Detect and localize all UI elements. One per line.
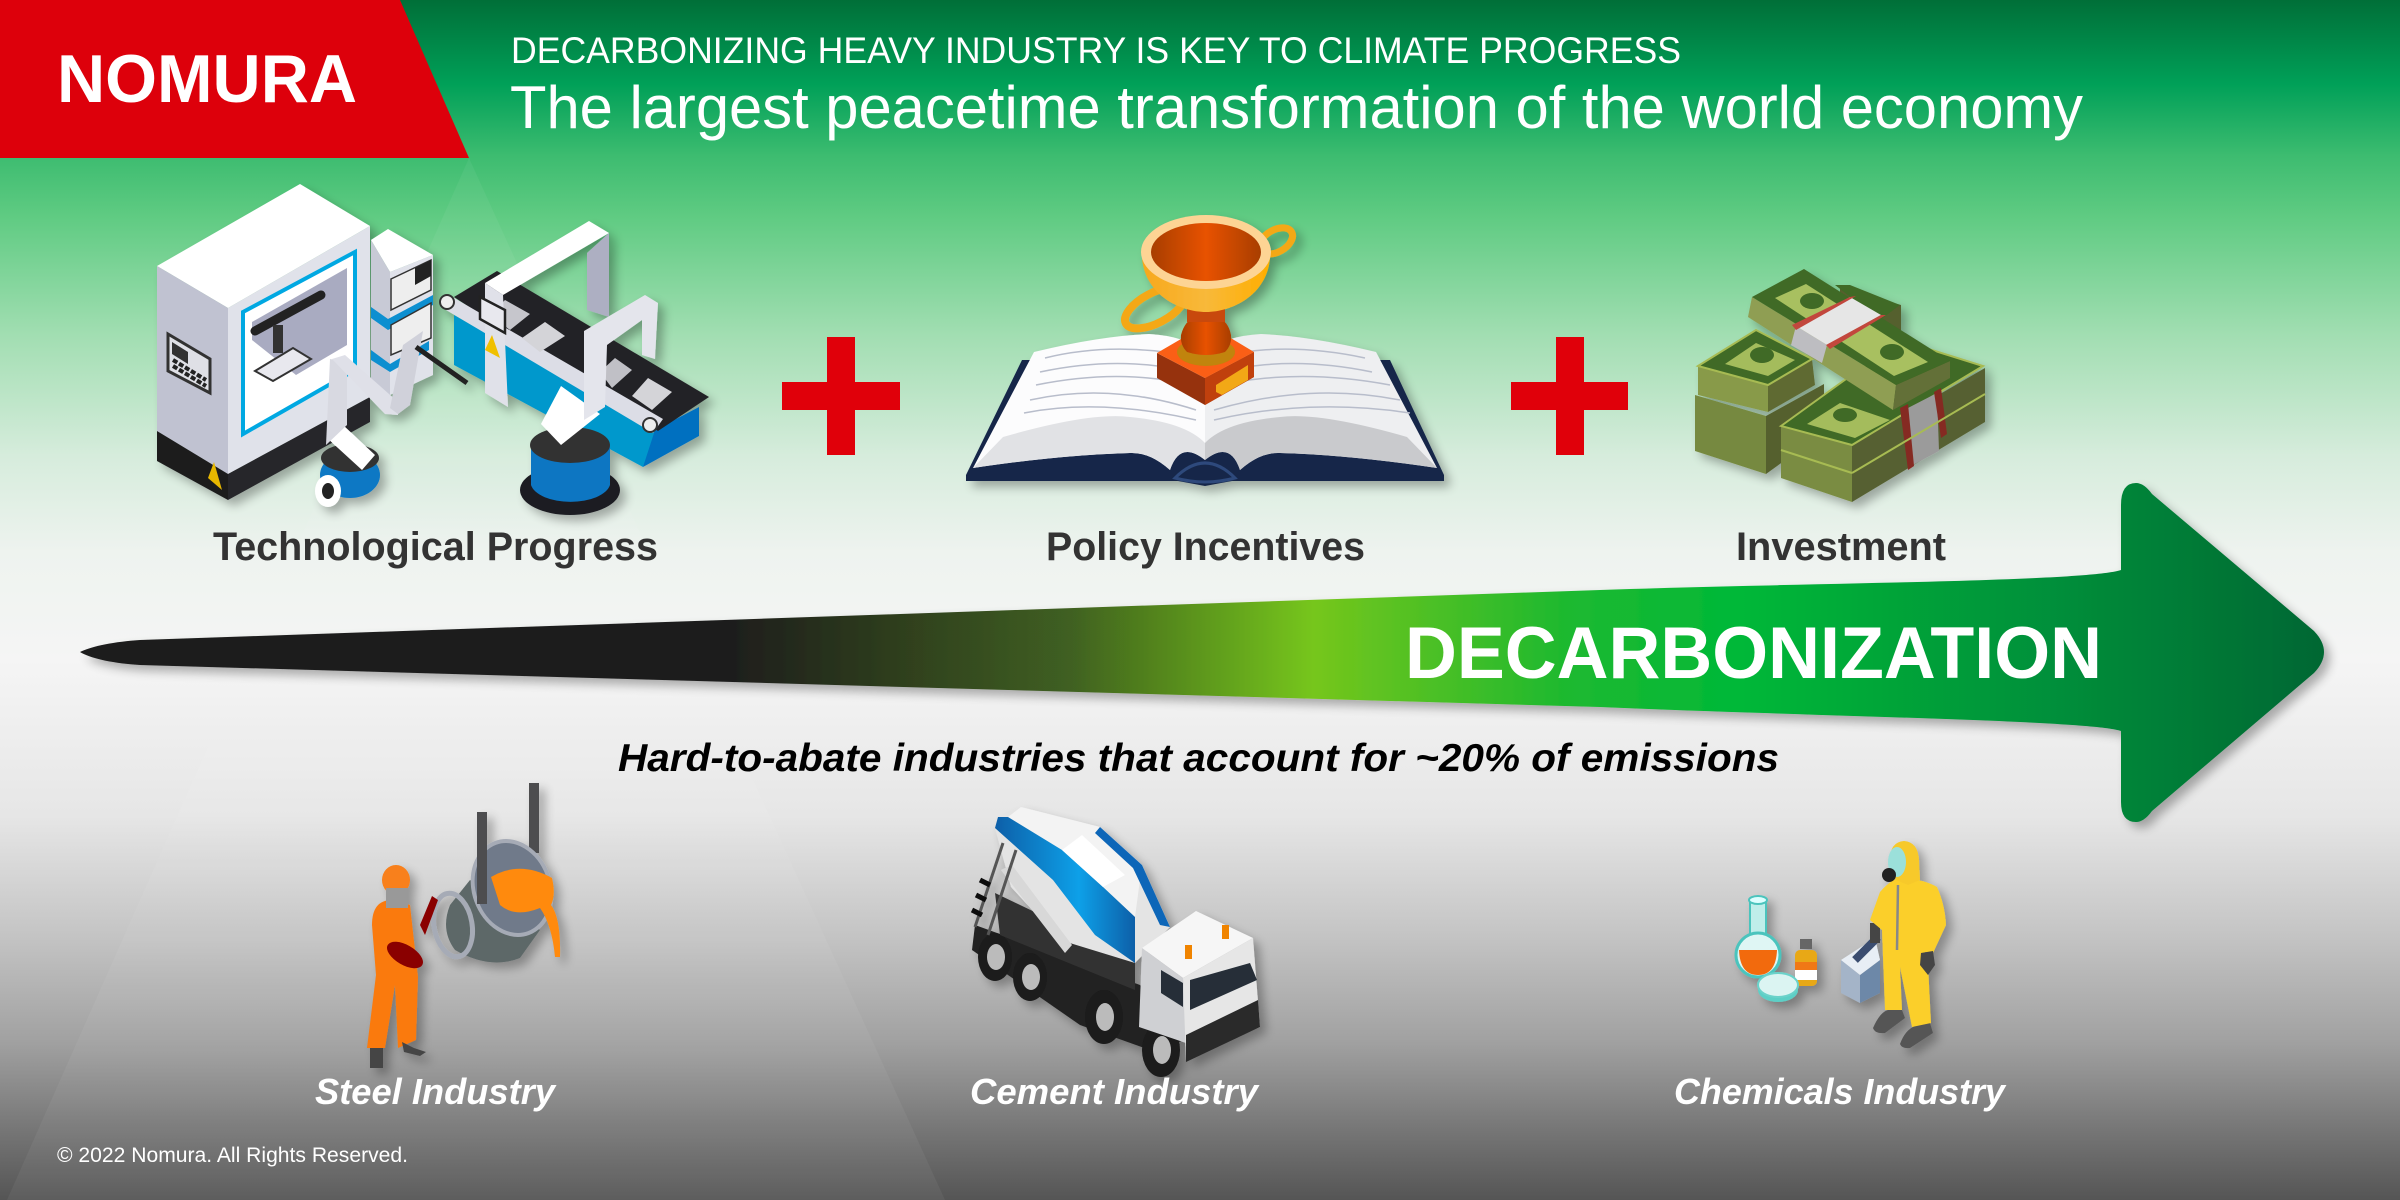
flask [1736, 896, 1780, 977]
label: Steel Industry: Steel Industry [315, 1071, 557, 1112]
front stack [1781, 340, 1985, 502]
logo wordmark: NOMURA [57, 41, 357, 117]
top stack [1748, 269, 1950, 410]
worker [367, 865, 438, 1068]
back stack [1695, 285, 1901, 474]
icon: cement mixer truck [972, 807, 1260, 1077]
truck cab [1139, 911, 1260, 1062]
label: Policy Incentives: Policy Incentives [1046, 525, 1365, 569]
robot arm one [315, 331, 467, 507]
icon: hazmat worker and lab glassware [1736, 841, 1946, 1048]
heading [510, 30, 2083, 141]
subheading: Hard-to-abate industries that account for ~20% of emissions [618, 737, 1779, 780]
logo panel: Nomura [0, 0, 469, 158]
conveyor [440, 221, 709, 467]
side cabinet [371, 229, 433, 395]
icon: plus sign [1511, 337, 1628, 455]
vial [1795, 939, 1817, 986]
chassis and wheels [972, 925, 1186, 1077]
open book [966, 334, 1444, 486]
decarbonization arrow [80, 483, 2324, 822]
ladle [429, 783, 564, 962]
label: Technological Progress: Technological Progress [213, 525, 658, 569]
arrow label: DECARBONIZATION [1405, 613, 2102, 694]
trophy [1119, 215, 1297, 405]
robot arm two [520, 295, 658, 515]
copyright: © 2022 Nomura. All Rights Reserved. [57, 1144, 408, 1167]
eyebrow heading: DECARBONIZING HEAVY INDUSTRY IS KEY TO CLIMATE PROGRESS [511, 30, 1681, 71]
icon: factory robots [157, 184, 709, 515]
icon: stacks of money [1695, 269, 1985, 502]
icon: steel worker and ladle [367, 783, 564, 1068]
label: Cement Industry: Cement Industry [970, 1071, 1260, 1112]
label: Chemicals Industry: Chemicals Industry [1674, 1071, 2007, 1112]
icon: book and trophy [966, 215, 1444, 486]
main cabinet [157, 184, 370, 500]
mixer drum [972, 807, 1170, 990]
hazmat suit worker [1841, 841, 1946, 1048]
main title: The largest peacetime transformation of the world economy [510, 74, 2083, 141]
dish [1758, 973, 1798, 1002]
icon: plus sign [782, 337, 900, 455]
label: Investment: Investment [1736, 525, 1946, 569]
